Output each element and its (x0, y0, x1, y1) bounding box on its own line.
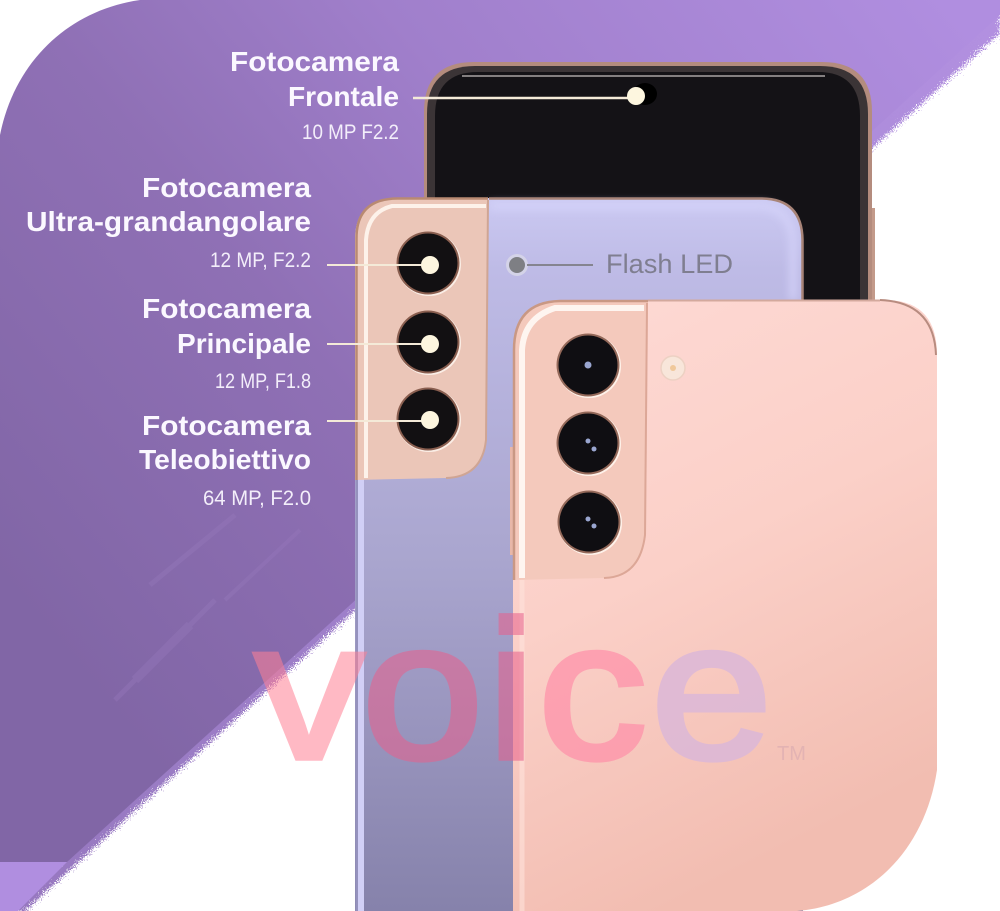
flash LED callout (506, 249, 733, 279)
label: telephoto camera: 64 MP, F2.0 (203, 487, 311, 510)
label: telephoto camera: Teleobiettivo (139, 444, 311, 475)
pink phone camera island (513, 301, 648, 580)
lens 3 (396, 388, 461, 452)
label: front camera: 10 MP F2.2 (302, 121, 399, 144)
voice watermark: i (487, 580, 535, 800)
leader lines and dots (327, 87, 645, 429)
label: main camera: Principale (177, 328, 311, 359)
label: telephoto camera (139, 410, 311, 510)
front camera punch hole (633, 83, 657, 105)
lens 1 (396, 232, 461, 296)
label: ultra-wide camera: Fotocamera (142, 172, 311, 203)
label: ultra-wide camera: 12 MP, F2.2 (210, 249, 311, 272)
label: ultra-wide camera: Ultra-grandangolare (26, 206, 311, 237)
label: main camera: Fotocamera (142, 293, 311, 324)
label: ultra-wide camera (26, 172, 311, 272)
violet phone camera island (355, 198, 488, 480)
violet phone (355, 198, 803, 911)
pink lens 3 (558, 490, 622, 555)
pink lens 1 (556, 334, 621, 398)
label: main camera (142, 293, 311, 393)
label: front camera (230, 46, 399, 144)
pink phone flash (661, 356, 685, 380)
pink phone (510, 300, 937, 911)
front phone (424, 62, 875, 300)
pink lens 2 (556, 412, 621, 476)
lens 2 (396, 310, 461, 375)
voice watermark (255, 580, 806, 800)
label: front camera: Frontale (288, 81, 399, 112)
voice watermark: v (255, 580, 364, 800)
label: main camera: 12 MP, F1.8 (215, 370, 311, 393)
voice watermark: e (651, 580, 772, 800)
label: front camera: Fotocamera (230, 46, 399, 77)
voice watermark: c (538, 580, 647, 800)
voice watermark: TM (777, 743, 806, 765)
label: telephoto camera: Fotocamera (142, 410, 311, 441)
voice watermark: o (362, 580, 483, 800)
flash LED callout: Flash LED (606, 249, 733, 279)
